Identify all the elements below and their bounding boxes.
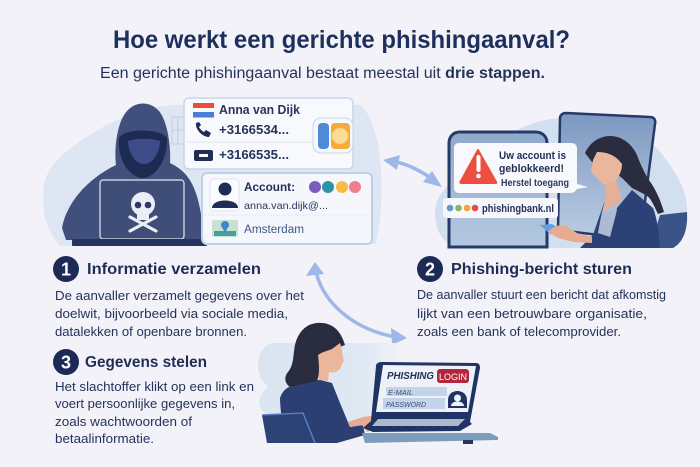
step 3 xyxy=(53,349,254,446)
login screen: PHISHING xyxy=(387,371,434,382)
body 3: betaalinformatie. xyxy=(55,431,154,446)
hacker face xyxy=(119,130,167,178)
icon: phone xyxy=(196,122,211,137)
icon: message xyxy=(194,150,213,161)
background cloud xyxy=(435,118,687,248)
arrow: lower double-headed xyxy=(306,262,407,345)
card: account data xyxy=(202,173,372,244)
blouse xyxy=(598,210,617,237)
laptop: PASSWORD xyxy=(386,400,427,409)
phone back xyxy=(558,113,655,240)
face xyxy=(591,152,622,185)
hand xyxy=(548,225,592,243)
card: contact data: +3166535... xyxy=(219,148,289,162)
chair xyxy=(650,212,687,248)
body 1: De aanvaller verzamelt gegevens over het xyxy=(55,288,304,303)
arrow: top double-headed xyxy=(383,155,442,187)
icon: app tile xyxy=(313,118,353,153)
phone in hand xyxy=(540,224,564,236)
heading 1: Informatie verzamelen xyxy=(87,261,261,278)
step 1 xyxy=(53,256,304,339)
arm xyxy=(348,415,388,432)
heading 3: Gegevens stelen xyxy=(85,354,207,371)
laptop xyxy=(363,362,480,432)
face xyxy=(317,343,344,381)
body 1: datalekken of openbare bronnen. xyxy=(55,324,247,339)
illustration: hacker with data cards xyxy=(43,98,382,246)
background cloud xyxy=(43,105,382,246)
badge 3: 3 xyxy=(61,352,71,372)
link pill: phishingbank.nl xyxy=(482,203,554,215)
badge 1 xyxy=(53,256,79,282)
phone front xyxy=(449,132,547,247)
body 2: zoals een bank of telecomprovider. xyxy=(417,324,621,339)
background cloud xyxy=(258,343,407,425)
speech bubble alert: geblokkeerd! xyxy=(499,163,564,175)
desk xyxy=(362,433,498,443)
icon: flag xyxy=(193,103,214,118)
step 2 xyxy=(417,256,666,339)
window outline xyxy=(172,117,184,144)
body 1 xyxy=(55,288,304,339)
subtitle: Een gerichte phishingaanval bestaat meestal uit drie stappen. xyxy=(100,65,545,82)
speech bubble alert: Herstel toegang xyxy=(501,178,569,189)
body 3: Het slachtoffer klikt op een link en xyxy=(55,379,254,394)
icon: skull and crossbones xyxy=(130,192,156,231)
body 2 xyxy=(417,287,666,339)
badge 2 xyxy=(417,256,443,282)
jacket xyxy=(580,190,660,248)
hair xyxy=(285,323,345,389)
badge 2: 2 xyxy=(425,260,435,280)
title: Hoe werkt een gerichte phishingaanval? xyxy=(113,26,570,54)
icon: user avatar xyxy=(210,179,239,211)
jacket xyxy=(280,380,365,443)
body 2: De aanvaller stuurt een bericht dat afkomstig xyxy=(417,287,666,302)
card: account data: anna.van.dijk@... xyxy=(244,200,328,212)
link pill xyxy=(443,198,558,218)
body 2: lijkt van een betrouwbare organisatie, xyxy=(417,306,647,321)
body 3: voert persoonlijke gegevens in, xyxy=(55,396,235,411)
body 1: doelwit, bijvoorbeeld via sociale media, xyxy=(55,306,288,321)
icon: warning triangle xyxy=(460,150,496,183)
card: account data: Account: xyxy=(244,182,295,194)
icon: user badge xyxy=(448,391,467,408)
card: contact data xyxy=(184,98,353,169)
hair xyxy=(585,136,664,214)
chair xyxy=(262,413,315,443)
illustration: woman at laptop with phishing login xyxy=(258,323,498,444)
card: contact data: Anna van Dijk xyxy=(219,103,300,117)
woman with phone xyxy=(540,136,664,248)
neck xyxy=(603,176,622,212)
heading 2: Phishing-bericht sturen xyxy=(451,261,632,278)
laptop with skull xyxy=(72,180,207,246)
icon: map pin xyxy=(212,220,238,237)
laptop: LOGIN xyxy=(439,372,467,383)
coloured dots xyxy=(309,181,361,193)
laptop: E-MAIL xyxy=(388,388,413,397)
badge 3 xyxy=(53,349,79,375)
body 3 xyxy=(55,379,254,446)
body 3: zoals wachtwoorden of xyxy=(55,414,192,429)
speech bubble alert: Uw account is xyxy=(499,150,566,162)
badge 1: 1 xyxy=(61,260,71,280)
illustration: woman receiving message on phone xyxy=(435,113,687,248)
hacker hood and body xyxy=(62,104,204,240)
card: account data: Amsterdam xyxy=(244,224,304,236)
card: contact data: +3166534... xyxy=(219,123,289,137)
speech bubble alert xyxy=(454,143,588,193)
woman xyxy=(280,323,388,443)
